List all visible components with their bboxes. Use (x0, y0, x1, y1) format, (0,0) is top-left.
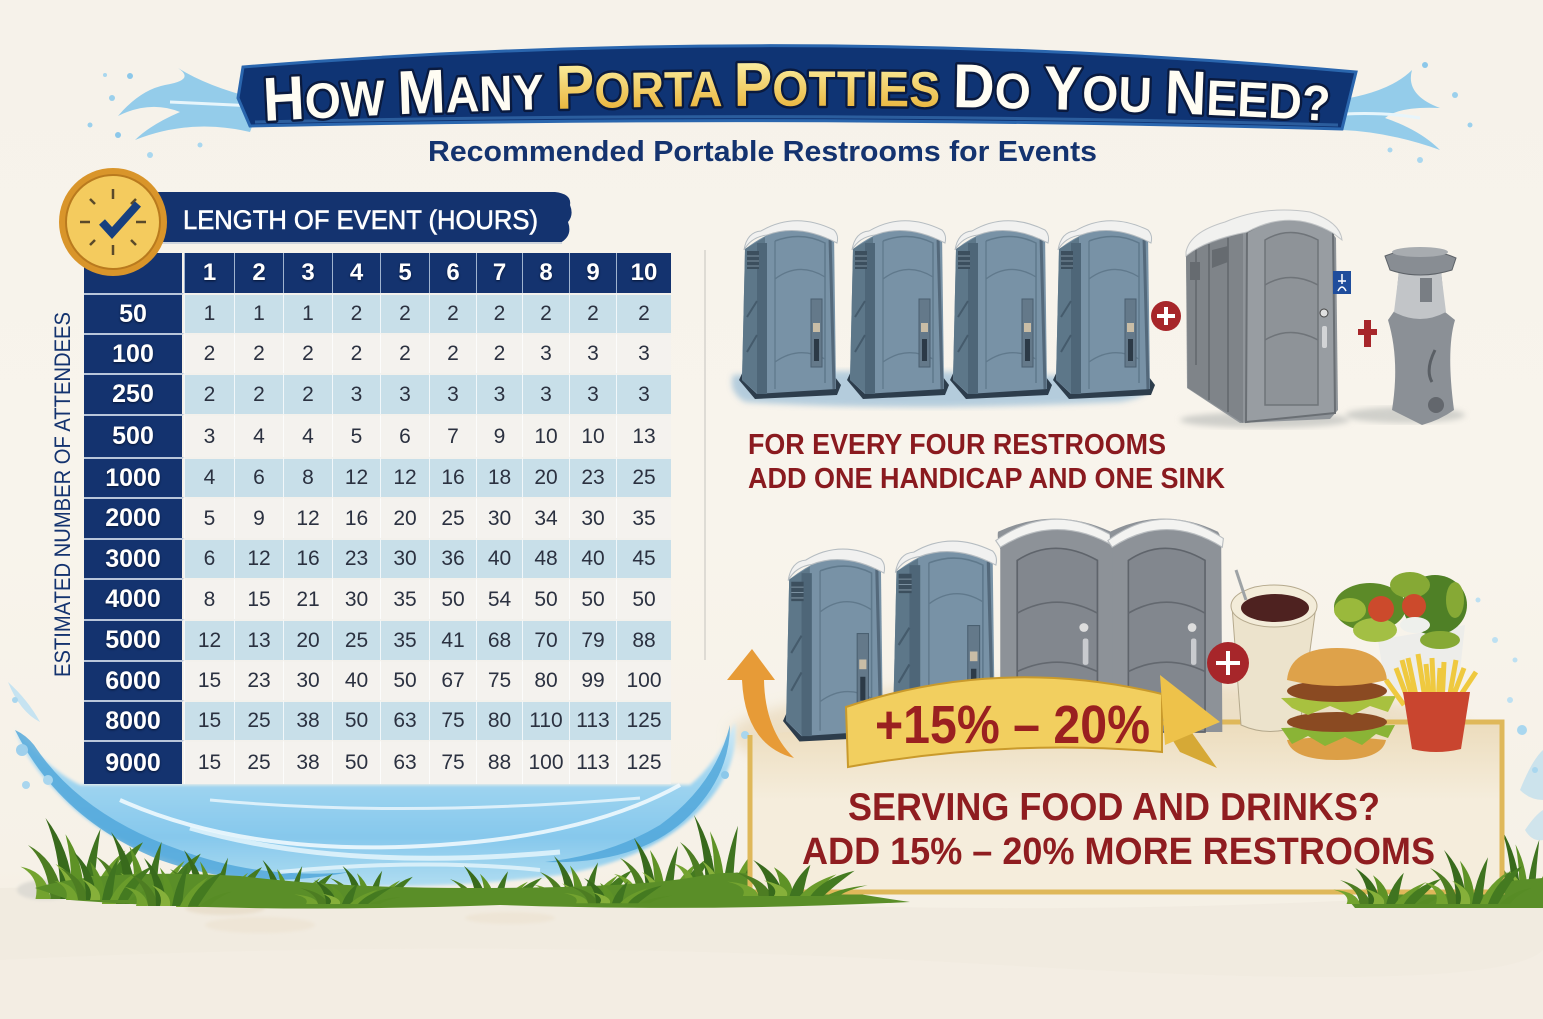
salad bowl (1334, 572, 1467, 690)
caption: four restrooms rule (748, 429, 1225, 495)
attendee table: 75 (441, 709, 465, 732)
handicap restroom (1180, 210, 1351, 428)
attendee table: 36 (441, 547, 465, 570)
attendee table: 3 (638, 382, 650, 406)
attendee table: 4 (204, 466, 215, 489)
ribbon text: +15% – 20% (875, 695, 1150, 755)
attendee table: 6000 (105, 666, 161, 694)
attendee table: 250 (112, 380, 154, 408)
attendee table: 8 (302, 466, 314, 489)
group: four standard restrooms (732, 221, 1155, 407)
soil patches (17, 880, 555, 933)
attendee table: 45 (632, 547, 656, 570)
attendee table: 38 (296, 751, 320, 774)
attendee table: 8 (204, 588, 215, 610)
right water splash (1476, 598, 1543, 840)
attendee table: 500 (112, 422, 154, 450)
small red plus (1358, 320, 1377, 347)
attendee table: 18 (488, 466, 511, 489)
attendee table: 9 (586, 259, 600, 286)
attendee table: 6 (253, 466, 265, 489)
attendee table: 67 (441, 669, 465, 692)
attendee table: 13 (632, 424, 656, 448)
attendee table: 2 (302, 382, 314, 406)
attendee table: 2 (252, 259, 266, 286)
attendee table: 15 (198, 709, 221, 732)
food plus badge (1207, 642, 1249, 684)
attendee table: 3 (638, 342, 650, 365)
attendee table: 70 (534, 628, 558, 652)
attendee table: 79 (581, 628, 605, 652)
attendee table: 99 (581, 669, 605, 692)
gray restroom right (1108, 519, 1223, 732)
attendee table: 50 (345, 709, 368, 732)
attendee table: 2 (204, 382, 215, 406)
attendee table: 20 (393, 506, 417, 530)
grass strip bottom right (1350, 830, 1543, 908)
attendee table: 30 (581, 506, 605, 530)
attendee table: 3 (351, 382, 362, 406)
attendee table: 20 (534, 466, 558, 489)
attendee table: 50 (441, 588, 465, 610)
attendee table: 54 (488, 588, 511, 610)
info panel (750, 720, 1502, 892)
attendee table: 100 (112, 340, 154, 368)
attendee table: 1 (204, 302, 215, 325)
attendee table: 7 (493, 259, 506, 286)
attendee table: 1 (203, 259, 216, 286)
attendee table: 63 (393, 751, 417, 774)
percent ribbon (846, 675, 1220, 768)
attendee table: 4000 (105, 585, 161, 613)
restroom 3 (950, 221, 1052, 399)
grass over panel bottom corners (727, 850, 1532, 904)
attendee table: 2 (587, 302, 599, 325)
restroom 4 (1053, 221, 1155, 399)
attendee table: 63 (393, 709, 417, 732)
french fries (1386, 654, 1476, 752)
attendee table: 13 (247, 628, 271, 652)
attendee table: 20 (296, 628, 320, 652)
attendee table: 3 (587, 382, 599, 406)
attendee table: 75 (488, 669, 511, 692)
attendee table: 80 (534, 669, 558, 692)
attendee table: 2000 (105, 504, 161, 532)
attendee table: 40 (488, 547, 511, 570)
attendee table: 16 (441, 466, 465, 489)
attendee table: 40 (345, 669, 368, 692)
attendee table: 8000 (105, 706, 161, 734)
blue restroom right (890, 541, 1000, 734)
attendee table: 6 (446, 259, 460, 286)
attendee table: 9 (253, 506, 265, 530)
attendee table: 80 (488, 709, 511, 732)
attendee table: 12 (345, 466, 368, 489)
attendee table: 10 (534, 424, 558, 448)
handicap sign glyph (1338, 274, 1346, 291)
attendee table: 25 (632, 466, 656, 489)
subtitle: Recommended Portable Restrooms for Events (428, 136, 1097, 168)
attendee table: 30 (345, 588, 368, 610)
attendee table: 1 (253, 302, 265, 325)
burger (1281, 648, 1396, 760)
attendee table (84, 253, 671, 784)
gray restroom left (996, 519, 1117, 732)
attendee table: 3 (447, 382, 459, 406)
attendee table: 7 (447, 424, 459, 448)
attendee table: 4 (350, 259, 363, 286)
vertical divider (704, 250, 706, 660)
attendee table: 88 (488, 751, 511, 774)
attendee table: 23 (345, 547, 368, 570)
length of event bar (150, 192, 572, 243)
attendee table: 2 (447, 302, 459, 325)
water shadow under four restrooms (732, 371, 1147, 407)
attendee table: 15 (247, 588, 271, 610)
attendee table: 2 (351, 342, 362, 365)
attendee table: 113 (576, 751, 610, 774)
attendee table: 3 (399, 382, 411, 406)
attendee table: 3 (540, 342, 552, 365)
attendee table: 3 (301, 259, 315, 286)
water pool under table (8, 682, 749, 886)
attendee table: 50 (393, 669, 417, 692)
attendee table: 100 (528, 751, 564, 774)
attendee table: 50 (534, 588, 558, 610)
attendee table: 5 (204, 506, 215, 530)
y axis label: ESTIMATED NUMBER OF ATTENDEES (50, 312, 75, 677)
attendee table: 113 (576, 709, 610, 732)
attendee table: 2 (399, 342, 411, 365)
attendee table: 2 (540, 302, 552, 325)
attendee table: 40 (581, 547, 605, 570)
attendee table: 23 (247, 669, 271, 692)
attendee table: 25 (247, 751, 271, 774)
hand wash sink (1345, 247, 1465, 425)
attendee table: 10 (581, 424, 605, 448)
attendee table: 48 (534, 547, 558, 570)
attendee table: 23 (581, 466, 605, 489)
attendee table: 88 (632, 628, 656, 652)
restroom 2 (847, 221, 949, 399)
left title splash (88, 68, 262, 158)
caption line two: ADD ONE HANDICAP AND ONE SINK (748, 463, 1225, 495)
attendee table: 2 (253, 382, 265, 406)
attendee table: 16 (345, 506, 368, 530)
attendee table: 3 (204, 424, 215, 448)
panel heading: SERVING FOOD AND DRINKS? (848, 786, 1380, 829)
attendee table: 8 (539, 259, 553, 286)
blue restroom left (783, 549, 888, 742)
attendee table: 4 (302, 424, 314, 448)
attendee table: 2 (494, 342, 505, 365)
attendee table: 1 (302, 302, 314, 325)
title banner (236, 44, 1358, 130)
orange up arrow (727, 649, 794, 758)
attendee table: 4 (253, 424, 265, 448)
attendee table: 25 (247, 709, 271, 732)
attendee table: 35 (632, 506, 656, 530)
attendee table: 3 (540, 382, 552, 406)
attendee table: 15 (198, 669, 221, 692)
attendee table: 25 (441, 506, 465, 530)
attendee table: 50 (632, 588, 656, 610)
drink cup (1231, 570, 1317, 732)
attendee table: 30 (296, 669, 320, 692)
attendee table: 38 (296, 709, 320, 732)
attendee table: 125 (626, 751, 662, 774)
attendee table: 6 (204, 547, 215, 570)
attendee table: 2 (351, 302, 362, 325)
attendee table: 12 (296, 506, 320, 530)
bar label: LENGTH OF EVENT (HOURS) (183, 205, 538, 235)
panel subheading: ADD 15% – 20% MORE RESTROOMS (802, 831, 1435, 873)
attendee table: 15 (198, 751, 221, 774)
plus badge (1151, 301, 1181, 331)
attendee table: 2 (447, 342, 459, 365)
attendee table: 25 (345, 628, 368, 652)
attendee table: 3 (587, 342, 599, 365)
group: lower restrooms (783, 519, 1223, 742)
attendee table: 2 (253, 342, 265, 365)
attendee table: 50 (119, 300, 147, 328)
title text: HOW MANY PORTA POTTIES DO YOU NEED? (264, 60, 1330, 124)
attendee table: 2 (494, 302, 505, 325)
attendee table: 12 (393, 466, 417, 489)
attendee table: 6 (399, 424, 411, 448)
attendee table: 50 (581, 588, 605, 610)
attendee table: 2 (302, 342, 314, 365)
attendee table: 12 (247, 547, 271, 570)
attendee table: 9000 (105, 748, 161, 776)
attendee table: 125 (626, 709, 662, 732)
attendee table: 35 (393, 628, 417, 652)
attendee table: 3 (494, 382, 505, 406)
attendee table: 5 (398, 259, 412, 286)
sand ground (0, 885, 1543, 1019)
attendee table: 1000 (105, 464, 161, 492)
right title splash (1338, 62, 1472, 163)
attendee table: 68 (488, 628, 511, 652)
attendee table: 100 (626, 669, 662, 692)
attendee table: 12 (198, 628, 221, 652)
attendee table: 3000 (105, 544, 161, 572)
grass strip bottom left (20, 815, 910, 909)
attendee table: 9 (494, 424, 505, 448)
caption line one: FOR EVERY FOUR RESTROOMS (748, 429, 1166, 461)
attendee table: 75 (441, 751, 465, 774)
sand smudge behind lower right panel (730, 680, 1470, 790)
attendee table: 50 (345, 751, 368, 774)
attendee table: 5 (351, 424, 362, 448)
attendee table: 21 (296, 588, 320, 610)
attendee table: 2 (204, 342, 215, 365)
attendee table: 34 (534, 506, 558, 530)
attendee table: 2 (638, 302, 650, 325)
restroom 1 (739, 221, 841, 399)
attendee table: 5000 (105, 626, 161, 654)
attendee table: 2 (399, 302, 411, 325)
attendee table: 10 (631, 259, 657, 286)
attendee table: 35 (393, 588, 417, 610)
attendee table: 110 (529, 709, 563, 732)
attendee table: 41 (441, 628, 465, 652)
attendee table: 16 (296, 547, 320, 570)
clock icon (59, 168, 167, 276)
attendee table: 30 (488, 506, 511, 530)
attendee table: 30 (393, 547, 417, 570)
